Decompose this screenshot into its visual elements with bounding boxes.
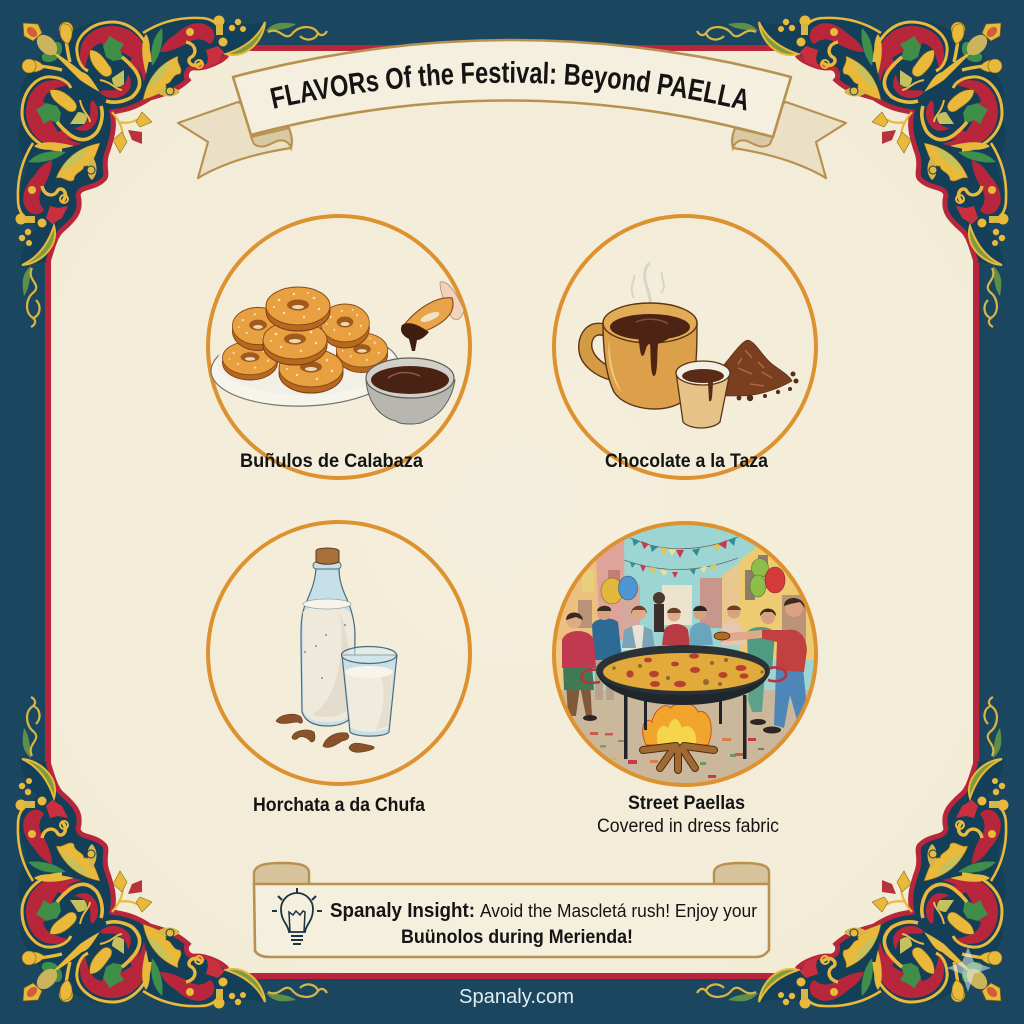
panel: street paellas <box>554 520 816 837</box>
woman left <box>562 612 597 721</box>
left ribbon fold <box>251 128 292 148</box>
circle frame <box>554 216 816 478</box>
paella pan <box>582 645 786 705</box>
label: Street Paellas <box>628 792 745 814</box>
ornament: top left corner <box>16 16 327 327</box>
back figure <box>653 592 665 632</box>
steam <box>632 263 664 313</box>
left ribbon tail <box>178 102 292 178</box>
insight text: Spanaly Insight: <box>330 899 475 922</box>
balloons <box>601 558 785 604</box>
confetti <box>590 732 764 778</box>
title banner <box>176 38 848 180</box>
person light blue <box>689 606 713 645</box>
sky <box>592 525 814 690</box>
footer url: Spanaly.com <box>459 985 574 1008</box>
insight text: Avoid the Mascletá rush! Enjoy your <box>480 900 757 921</box>
label: Chocolate a la Taza <box>605 450 768 472</box>
ground <box>561 690 809 783</box>
label: Horchata a da Chufa <box>253 794 425 816</box>
caption: Covered in dress fabric <box>597 816 779 837</box>
label: Buñulos de Calabaza <box>240 450 423 472</box>
panel: chocolate <box>554 216 816 478</box>
plate <box>210 327 400 409</box>
circle frame <box>208 216 470 478</box>
ornament: bottom left corner <box>16 697 327 1008</box>
campfire <box>643 703 714 770</box>
cocoa pile <box>718 340 798 401</box>
bottle <box>301 548 355 726</box>
person white dress <box>622 606 656 650</box>
donut pile <box>222 287 388 393</box>
circle frame <box>208 522 470 784</box>
pan stand legs <box>624 695 746 759</box>
person pale shirt <box>722 606 746 645</box>
chocolate bowl <box>366 358 455 424</box>
street scene <box>555 520 815 790</box>
panel: horchata <box>208 522 470 816</box>
crowd <box>562 592 808 734</box>
person red top <box>662 608 690 645</box>
watermark star <box>947 947 991 992</box>
serving plate <box>714 632 730 640</box>
mug <box>579 303 697 409</box>
left roll <box>254 863 309 885</box>
man right <box>718 598 808 734</box>
ornament: bottom right corner <box>697 697 1008 1008</box>
right ribbon fold <box>732 128 773 148</box>
glass <box>342 646 397 736</box>
banner body <box>233 40 791 137</box>
person teal <box>747 608 776 725</box>
small cup <box>676 361 730 428</box>
bunting <box>624 537 738 578</box>
person blue shirt <box>592 606 622 700</box>
right roll <box>714 863 769 885</box>
scroll body <box>254 884 769 957</box>
ornament: top right corner <box>697 16 1008 327</box>
title: FLAVORs Of the Festival: Beyond PAELLA <box>270 61 746 111</box>
insight scroll <box>254 863 769 957</box>
hand with dipped bunuelo <box>401 282 464 351</box>
chufa nuts <box>276 714 374 752</box>
panel: bunuelos <box>208 216 470 478</box>
icon: light bulb <box>272 888 322 944</box>
right ribbon tail <box>732 102 846 178</box>
circle frame <box>554 523 816 785</box>
insight second line: Buünolos during Merienda! <box>401 926 633 948</box>
buildings <box>556 540 814 690</box>
